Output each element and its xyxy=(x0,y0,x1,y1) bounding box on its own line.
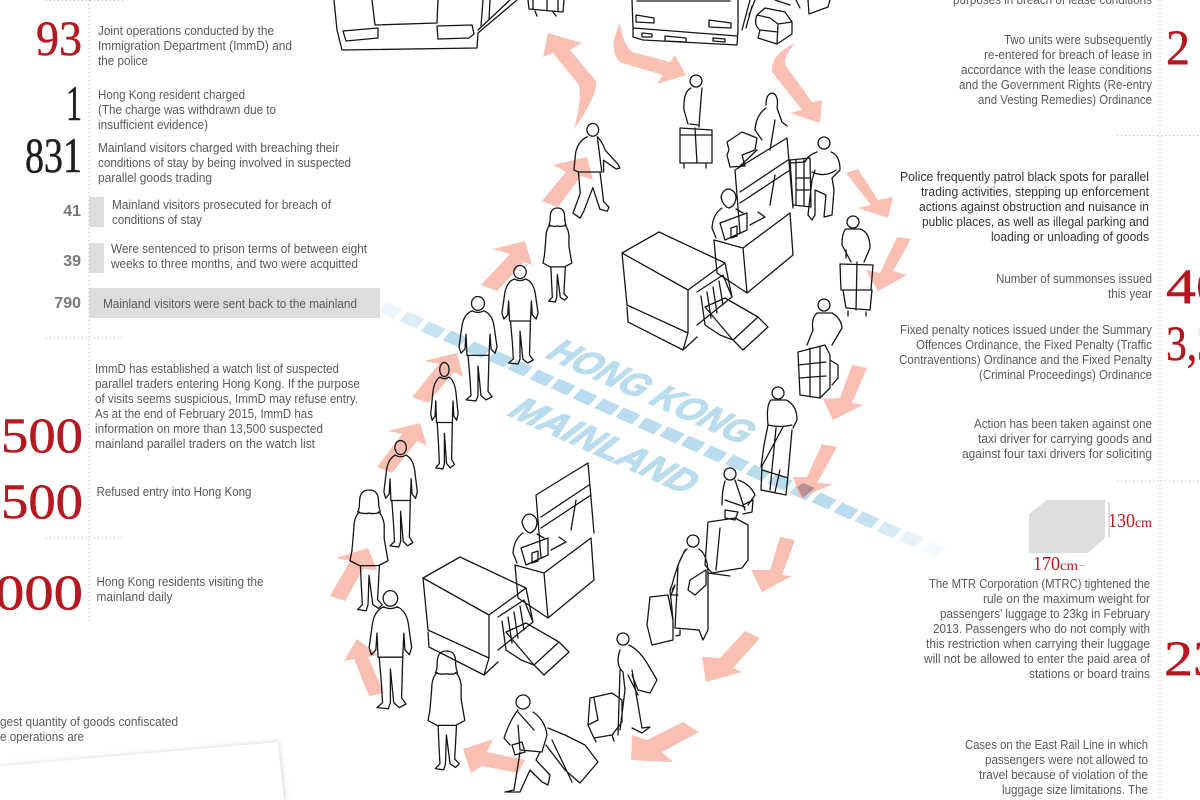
text: police patrols xyxy=(900,169,1149,244)
stat: watch list xyxy=(1,361,360,463)
text: taxi drivers: taxi driver for carrying goods and xyxy=(978,431,1152,446)
arrow: left 2 xyxy=(330,548,377,601)
person: man with handcart xyxy=(790,137,840,220)
bar: 41 prosecuted: 41 xyxy=(63,203,81,220)
stat: 93 joint operations: Joint operations conducted by the xyxy=(98,23,274,38)
person: man in shirt xyxy=(431,363,458,469)
stat: 831 Mainland visitors charged xyxy=(25,127,351,185)
diagram: luggage size limit: cm xyxy=(1060,559,1078,574)
people: queue walking up the left side xyxy=(350,123,620,770)
arrow: up to left bus xyxy=(543,33,596,129)
text: East Rail Line cases: Cases on the East Rail Line in which xyxy=(965,737,1148,752)
stat: watch list: ImmD has established a watch list of suspected xyxy=(95,361,339,376)
stat: fixed penalty notices: (Criminal Proceedings) Ordinance xyxy=(979,367,1152,382)
arrow: right 3 xyxy=(823,365,867,420)
text: confiscated goods: e operations are xyxy=(0,729,84,744)
stat: fixed penalty notices xyxy=(899,315,1200,382)
stat: 1 Hong Kong resident charged: 1 xyxy=(66,75,82,131)
stat: 93 joint operations: Immigration Department (ImmD) and xyxy=(98,38,292,53)
stat: two units re-entered: accordance with the lease conditions xyxy=(961,62,1152,77)
stat: 831 Mainland visitors charged: conditions of stay by being involved in suspected xyxy=(98,155,351,170)
text: East Rail Line cases: passengers were not allowed to xyxy=(985,752,1148,767)
stat: 93 joint operations: the police xyxy=(98,53,148,68)
stat: 831 Mainland visitors charged: Mainland visitors charged with breaching their xyxy=(98,140,340,155)
person: man with cart and bag xyxy=(588,633,657,742)
stat: 23kg MTR weight rule: stations or board trains xyxy=(1029,666,1150,681)
dotted guide lines, left xyxy=(46,0,126,622)
arrow: lower right 2 xyxy=(702,631,760,682)
map label: Mainland: MAINLAND xyxy=(502,391,708,501)
stat: refused entry: Refused entry into Hong Kong xyxy=(96,484,252,499)
text: taxi drivers: Action has been taken against one xyxy=(974,416,1152,431)
text: East Rail Line cases: travel because of violation of the xyxy=(979,767,1148,782)
arrow: right 4 xyxy=(793,444,837,498)
text: police patrols: loading or unloading of goods xyxy=(991,229,1149,244)
bar: 790 sent back xyxy=(54,288,380,318)
person: woman with ponytail xyxy=(459,297,497,401)
dotted guide lines, right xyxy=(1117,0,1198,800)
arrow: lower right 1 xyxy=(751,537,795,592)
stat: watch list: As at the end of February 2015, ImmD has xyxy=(95,406,313,421)
arrow: bottom xyxy=(463,739,525,773)
bar: 39 sentenced: 39 xyxy=(63,253,81,270)
stat: two units re-entered: and the Government Rights (Re-entry xyxy=(959,77,1152,92)
flow arrows: pink circular route xyxy=(330,23,911,773)
bar: 39 sentenced xyxy=(63,241,367,273)
stat: 23kg MTR weight rule: 2013. Passengers who do not comply with xyxy=(933,621,1150,636)
stat: 93 joint operations: 93 xyxy=(36,10,82,66)
person: woman with shoulder bag xyxy=(428,651,465,770)
illustration: right bus xyxy=(632,0,738,45)
arrow: right 1 xyxy=(846,169,893,218)
map label: Hong Kong: HONG KONG xyxy=(540,333,764,451)
illustration: security station, Hong Kong side xyxy=(622,138,793,350)
arrow: left 4 xyxy=(412,353,463,403)
person: man with back turned xyxy=(502,266,538,364)
person: man in jacket xyxy=(369,591,412,709)
stat: watch list: 500 xyxy=(1,407,83,463)
person: walker with outstretched arm xyxy=(573,123,620,218)
bar: 41 prosecuted: Mainland visitors prosecuted for breach of xyxy=(112,197,331,212)
stat: 23kg MTR weight rule: rule on the maximum weight for xyxy=(983,591,1151,606)
arrow: left 5 xyxy=(481,241,532,291)
bar: 41 prosecuted xyxy=(63,197,331,227)
stat: 23kg MTR weight rule xyxy=(923,576,1200,686)
stat: 1 Hong Kong resident charged: Hong Kong resident charged xyxy=(98,87,245,102)
stat: watch list: information on more than 13,500 suspected xyxy=(95,421,323,436)
person: man walking xyxy=(384,441,417,547)
people: traders with trolleys on the right side xyxy=(504,75,873,792)
bar: 39 sentenced: weeks to three months, and two were acquitted xyxy=(110,256,358,271)
stat: watch list: parallel traders entering Hong Kong. If the purpose xyxy=(95,376,360,391)
text: police patrols: Police frequently patrol black spots for parallel xyxy=(900,169,1149,184)
left panel: enforcement figures xyxy=(0,0,380,800)
diagram: luggage size limit: cm xyxy=(1135,516,1152,531)
person: woman dragging a large bag xyxy=(504,695,598,792)
text: East Rail Line cases: luggage size limitations. The xyxy=(1002,782,1148,797)
person: man with tall case xyxy=(840,216,873,316)
diagram: luggage size limit xyxy=(1029,500,1152,575)
stat: two units re-entered xyxy=(953,0,1190,107)
bar: 790 sent back: 790 xyxy=(54,295,81,312)
arrow: left 6 xyxy=(542,157,593,207)
stat: fixed penalty notices: Contraventions) Ordinance and the Fixed Penalty xyxy=(899,352,1152,367)
bar: 790 sent back: Mainland visitors were sent back to the mainland xyxy=(103,296,357,311)
stat: summonses: this year xyxy=(1108,286,1153,301)
stat: fixed penalty notices: Fixed penalty notices issued under the Summary xyxy=(900,322,1152,337)
stat: two units re-entered: and Vesting Remedies) Ordinance xyxy=(978,92,1152,107)
person: man at stacked boxes xyxy=(798,299,842,398)
arrow: left 1 xyxy=(344,639,384,696)
person: man with shoulder strap and bags xyxy=(705,468,755,576)
border line: Hong Kong / Mainland dashed boundary xyxy=(377,302,946,557)
stat: 93 joint operations xyxy=(36,10,292,68)
stat: 23kg MTR weight rule: will not be allowed to enter the paid area of xyxy=(923,651,1150,666)
person: man pushing cart across the border xyxy=(761,387,797,495)
paper card, bottom left xyxy=(0,741,286,800)
bar: 39 sentenced: Were sentenced to prison terms of between eight xyxy=(111,241,367,256)
person: man in apron with suitcase xyxy=(647,535,708,645)
stat: 23kg MTR weight rule: The MTR Corporation (MTRC) tightened the xyxy=(929,576,1150,591)
illustration: boxes by right bus xyxy=(742,0,830,44)
stat: two units re-entered: Two units were subsequently xyxy=(1004,32,1152,47)
arrow: lower right 3 xyxy=(631,722,699,762)
stat: 1 Hong Kong resident charged: insufficient evidence) xyxy=(98,117,208,132)
text: confiscated goods: gest quantity of goods confiscated xyxy=(0,714,178,729)
text: taxi drivers: against four taxi drivers for soliciting xyxy=(962,446,1152,461)
stat: refused entry xyxy=(1,473,252,529)
stat: 1 Hong Kong resident charged: (The charge was withdrawn due to xyxy=(98,102,276,117)
stat: watch list: mainland parallel traders on the watch list xyxy=(95,436,315,451)
diagram: luggage size limit: 130 xyxy=(1108,510,1135,532)
arrow: from boxes xyxy=(772,43,822,123)
stat: watch list: of visits seems suspicious, ImmD may refuse entry. xyxy=(95,391,358,406)
stat: Hong Kong residents visiting the mainland: mainland daily xyxy=(96,589,173,604)
text: taxi drivers xyxy=(962,416,1152,461)
stat: summonses xyxy=(996,258,1200,314)
person: woman with bundled bags xyxy=(727,93,787,168)
stat: Hong Kong residents visiting the mainland: Hong Kong residents visiting the xyxy=(96,574,264,589)
illustration: security station, Mainland side xyxy=(423,463,594,675)
right panel: enforcement actions xyxy=(899,0,1200,800)
stat: summonses: Number of summonses issued xyxy=(996,271,1152,286)
diagram: luggage size limit: 170 xyxy=(1033,553,1060,575)
illustration: left bus xyxy=(334,0,517,50)
person: woman in dress xyxy=(543,208,572,302)
arrow: right 2 xyxy=(866,237,911,291)
stat: two units re-entered: 2 xyxy=(1166,19,1190,75)
illustration: luggage by left bus xyxy=(528,0,564,16)
arrow: from right bus xyxy=(614,23,686,84)
text: East Rail Line cases xyxy=(965,737,1148,797)
person: woman in jacket xyxy=(350,490,388,611)
stat: two units re-entered: re-entered for breach of lease in xyxy=(984,47,1152,62)
stat: 23kg MTR weight rule: passengers’ luggage to 23kg in February xyxy=(940,606,1150,621)
stat: 23kg MTR weight rule: this restriction when carrying their luggage xyxy=(926,636,1150,651)
stat: 831 Mainland visitors charged: 831 xyxy=(25,127,82,183)
stat: refused entry: 500 xyxy=(1,473,83,529)
stat: 1 Hong Kong resident charged xyxy=(66,75,276,132)
stat: 831 Mainland visitors charged: parallel goods trading xyxy=(98,170,212,185)
text: police patrols: public places, as well as illegal parking and xyxy=(922,214,1149,229)
text: police patrols: trading activities, stepping up enforcement xyxy=(921,184,1149,199)
arrow: left 3 xyxy=(377,423,427,473)
text: confiscated goods xyxy=(0,714,178,744)
arrow overlap with border dash xyxy=(797,483,815,498)
text: police patrols: actions against obstruction and nuisance in xyxy=(919,199,1149,214)
stat: Hong Kong residents visiting the mainland xyxy=(0,564,264,620)
stat: fixed penalty notices: Offences Ordinance, the Fixed Penalty (Traffic xyxy=(916,337,1152,352)
person: man with suitcase xyxy=(680,75,712,168)
bar: 41 prosecuted: conditions of stay xyxy=(112,212,202,227)
